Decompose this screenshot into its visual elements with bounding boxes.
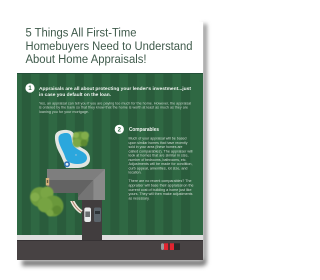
step 2 heading: Comparables (129, 127, 159, 133)
step 2 body: look at homes that are similar in size, (128, 153, 188, 158)
step 1 body: loaning you for your mortgage. (39, 109, 89, 114)
step 2 body: There are no recent comparables? The (128, 178, 192, 183)
number badge 1 (25, 83, 35, 93)
step 2 body: as necessary. (128, 195, 150, 200)
curved walkway (70, 194, 82, 212)
infographic page (17, 22, 210, 269)
step 1 (25, 83, 191, 114)
icon: garden lamp (46, 178, 49, 186)
step 1 heading: Appraisals are all about protecting your lender's investment...just (39, 86, 191, 91)
pool float (75, 154, 77, 156)
step 1 body: is ordered by the bank so that they know that the home is worth at least as much as they are (39, 105, 188, 110)
step 2 body: sold in your area (these homes are (128, 144, 182, 149)
step 1 body: Yes, an appraisal can tell you if you are paying too much for the home. However, the appraisal (39, 100, 191, 106)
icon: red car (161, 243, 180, 250)
step 2 body: Adjustments will be made for condition, (128, 161, 192, 166)
icon: tree by pool (72, 132, 89, 148)
road (17, 240, 203, 260)
page background (17, 22, 203, 260)
icon: large tree (30, 186, 64, 216)
step 2 body: current cost of building a home just like (128, 187, 192, 192)
title: Homebuyers Need to Understand (26, 39, 192, 53)
step 2 body: appraiser will base their appraisal on the (128, 182, 194, 188)
pool ladder badge (64, 161, 70, 167)
icon: house roof (47, 169, 105, 201)
number badge 2: 2 (118, 127, 122, 133)
step 2 body: number of bedrooms, bathrooms, etc. (128, 157, 186, 162)
illustration: pool (55, 130, 90, 168)
step 1 heading: in case you default on the loan. (39, 92, 111, 97)
step 2 body (128, 136, 194, 200)
step 2 body: Much of your appraisal will be based (128, 136, 186, 140)
step 2 body: upon similar homes that have recently (128, 140, 188, 145)
step 2 body: yours. They will then make adjustments (128, 191, 193, 196)
step 2 body: location. (128, 170, 142, 175)
number badge 1: 1 (28, 86, 32, 92)
icon: white car (84, 208, 91, 222)
driveway (82, 199, 102, 240)
step 1 heading (39, 86, 191, 97)
step 2 (115, 125, 194, 200)
title: About Home Appraisals! (26, 52, 146, 66)
page shadow (22, 24, 206, 266)
green striped panel (17, 73, 203, 235)
icon: dark car (94, 208, 101, 222)
title (26, 26, 192, 66)
step 1 body (39, 100, 191, 114)
lawn patch (73, 194, 79, 200)
sidewalk (17, 235, 203, 240)
step 2 body: curb appeal, amenities, lot size, and (128, 165, 188, 170)
step 2 body: called comparables). The appraiser will (128, 148, 193, 153)
title: 5 Things All First-Time (26, 26, 137, 40)
